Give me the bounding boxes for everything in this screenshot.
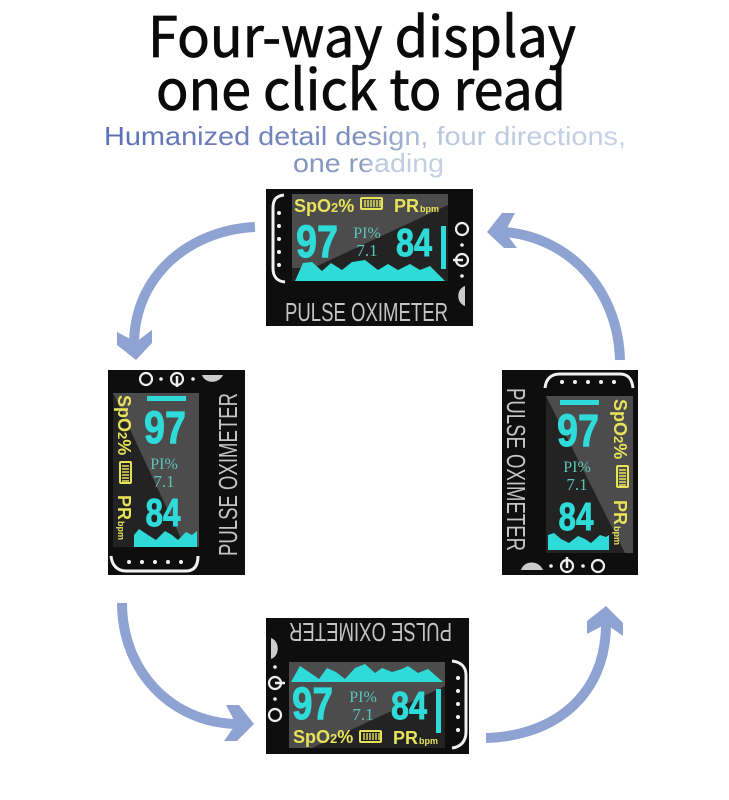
- device label: PULSE OXIMETER: [501, 388, 531, 551]
- value: 84: 84: [558, 496, 594, 539]
- device label: PULSE OXIMETER: [289, 617, 452, 647]
- bracket with dots: [111, 556, 198, 571]
- value: PI: 7.1: [352, 705, 374, 724]
- screen: [113, 393, 199, 547]
- subtitle: Humanized detail design, four directions,: [104, 121, 626, 151]
- screen: [292, 194, 448, 281]
- value: PI: PI%: [150, 456, 178, 473]
- reading: SpO2: SpO2%: [294, 196, 354, 216]
- icons: buttons: [140, 373, 223, 387]
- arrow: bottom to right: [486, 606, 623, 738]
- screen: [546, 396, 633, 553]
- reading: SpO2: SpO 2 %: [114, 395, 134, 455]
- reading: PR: PRbpm: [394, 196, 439, 216]
- bar: [147, 396, 186, 401]
- value: PI: [563, 459, 591, 494]
- value: PI: [349, 689, 377, 724]
- device: bottom: [266, 617, 469, 754]
- value: 97: 97: [292, 678, 333, 729]
- value: PI: 7.1: [356, 241, 378, 260]
- title: one click to read: [156, 46, 566, 127]
- device: right: [501, 370, 638, 575]
- value: PI: 7.1: [566, 475, 588, 494]
- arrow: left to bottom: [122, 603, 254, 741]
- icon: battery: [361, 198, 382, 209]
- value: PI: [353, 225, 381, 260]
- value: 84: 84: [391, 685, 427, 728]
- waveform: [134, 529, 197, 547]
- value: PI: 7.1: [153, 472, 175, 491]
- bar: [436, 689, 441, 733]
- waveform: [548, 533, 609, 550]
- value: PI: PI%: [563, 459, 591, 476]
- value: 84: 84: [396, 222, 432, 265]
- icon: battery: [617, 466, 628, 487]
- arrow: right to top: [487, 213, 620, 360]
- arrow: top to left: [117, 227, 255, 360]
- bar: [441, 226, 446, 269]
- icons: buttons: [269, 638, 285, 721]
- waveform: [291, 664, 443, 682]
- value: PI: PI%: [349, 689, 377, 706]
- icons: buttons: [521, 557, 604, 572]
- value: PI: PI%: [353, 225, 381, 242]
- reading: SpO2: SpO2%: [293, 727, 353, 747]
- value: 97: 97: [144, 402, 186, 453]
- reading: SpO2: SpO 2 %: [610, 399, 630, 459]
- subtitle: one reading: [293, 148, 444, 178]
- device label: PULSE OXIMETER: [285, 297, 448, 327]
- screen: [289, 662, 445, 748]
- bracket with dots: [545, 374, 633, 388]
- icons: buttons: [453, 223, 468, 306]
- bracket with dots: [273, 195, 285, 282]
- device: top: [266, 189, 473, 327]
- bracket with dots: [452, 661, 466, 748]
- icon: battery: [120, 462, 131, 483]
- title: [148, 0, 576, 127]
- reading: PR: PR bpm: [610, 500, 630, 545]
- value: 97: 97: [296, 216, 338, 267]
- reading: PR: PR bpm: [114, 495, 134, 540]
- subtitle: [104, 121, 626, 178]
- bar: [560, 400, 599, 405]
- icon: battery: [360, 731, 381, 742]
- device label: PULSE OXIMETER: [213, 393, 243, 556]
- reading: PR: PRbpm: [393, 728, 438, 748]
- value: 84: 84: [146, 492, 181, 535]
- value: 97: 97: [557, 405, 599, 456]
- value: PI: [150, 456, 178, 491]
- waveform: [295, 260, 445, 281]
- device: left: [108, 370, 245, 575]
